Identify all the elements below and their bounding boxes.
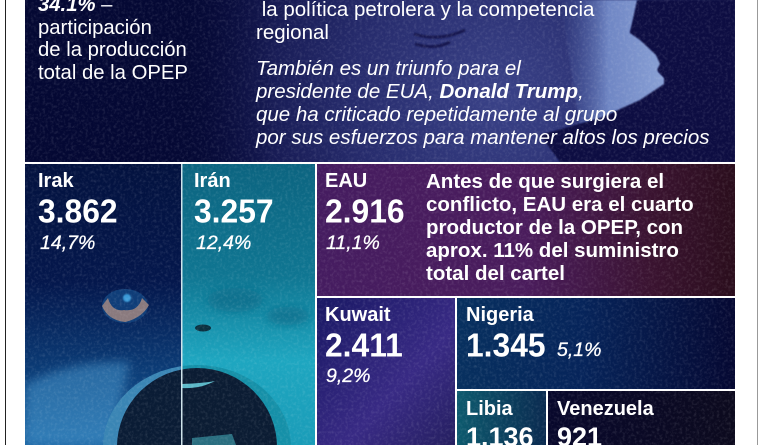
text: Trump note: También es un triunfo para el [256, 57, 521, 80]
cell: Venezuela [557, 399, 654, 445]
panel: Nigeria background [457, 298, 735, 389]
text: EAU note: conflicto, EAU era el cuarto [426, 193, 694, 216]
cell: EAU: EAU [325, 170, 367, 192]
panel: Libia background [457, 391, 546, 445]
panel: Irak background [25, 164, 181, 445]
cell: Kuwait: 2.411 [325, 326, 403, 364]
text: OPEP share [38, 0, 188, 84]
text: regional context: regional [256, 21, 329, 44]
cell: EAU [325, 170, 405, 254]
text: OPEP share: de la producción [38, 39, 187, 61]
text: EAU note: aprox. 11% del suministro [426, 239, 679, 262]
text: EAU note: productor de la OPEP, con [426, 216, 683, 239]
cell: Kuwait: Kuwait [325, 304, 391, 326]
text: Trump note: por sus esfuerzos para mantener altos los precios [256, 126, 710, 149]
cell: Libia [466, 399, 534, 445]
cell: Irán [194, 170, 274, 254]
text: Trump note [256, 57, 710, 149]
panel: EAU background [317, 164, 735, 296]
cell: Nigeria [466, 304, 601, 364]
cell: Nigeria: 1.345 [466, 326, 546, 364]
cell: Irak: Irak [38, 170, 74, 192]
cell: Kuwait: 9,2% [326, 365, 370, 387]
cell: Irak: 14,7% [40, 232, 95, 254]
text: EAU note [426, 170, 694, 285]
panel: Irán background [182, 164, 315, 445]
cell: Nigeria: Nigeria [466, 304, 534, 326]
text: OPEP share: total de la OPEP [38, 62, 188, 84]
text: OPEP share: participación [38, 17, 152, 39]
cell: Irán: 3.257 [194, 192, 274, 230]
cell: Irak [38, 170, 118, 254]
text: Trump note: que ha criticado repetidamente al grupo [256, 103, 617, 126]
cell: Nigeria: 5,1% [557, 339, 601, 361]
cell: Irán: 12,4% [196, 232, 251, 254]
panel: Kuwait background [317, 298, 455, 445]
cell: Irak: 3.862 [38, 192, 118, 230]
panel: Venezuela background [548, 391, 735, 445]
cell: Kuwait [325, 304, 403, 387]
cell: EAU: 11,1% [326, 232, 380, 254]
panel: header background with silhouette [25, 0, 735, 162]
text: regional context [256, 0, 594, 44]
text: EAU note: Antes de que surgiera el [426, 170, 664, 193]
cell: Irán: Irán [194, 170, 231, 192]
cell: EAU: 2.916 [325, 192, 405, 230]
text: Trump note: presidente de EUA, Donald Trump, [256, 80, 584, 103]
text: EAU note: total del cartel [426, 262, 565, 285]
